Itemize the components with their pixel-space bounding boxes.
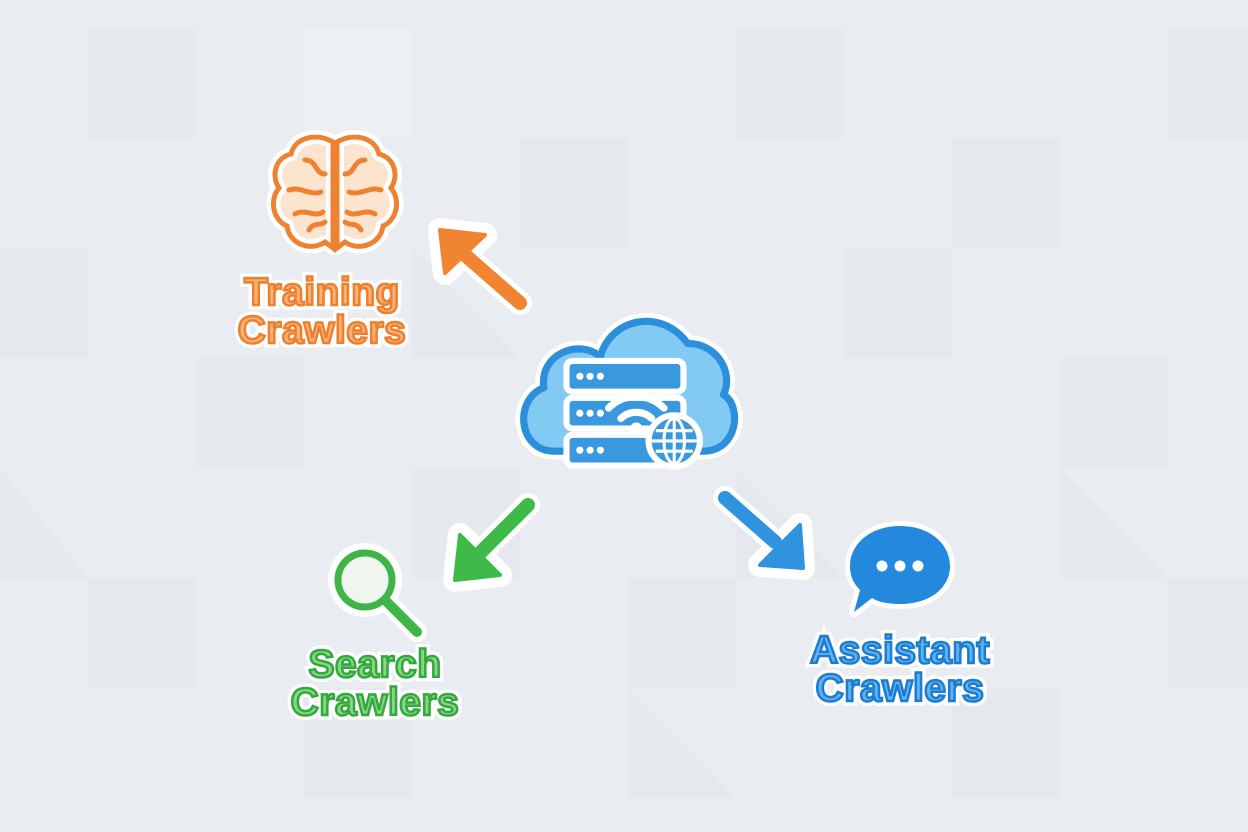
- icon: brain (training): [266, 130, 404, 255]
- label: Search Crawlers: Crawlers: [291, 681, 459, 724]
- arrow: green to search: [443, 493, 540, 592]
- label: Search Crawlers: [288, 643, 462, 724]
- label: Assistant Crawlers: Assistant: [810, 629, 990, 672]
- arrow: orange to training: [428, 218, 532, 315]
- icon: chat bubble (assistant): [845, 521, 955, 617]
- label: Assistant Crawlers: Crawlers: [816, 667, 984, 710]
- label: Training Crawlers: Crawlers: [238, 309, 406, 352]
- label: Assistant Crawlers: Crawlers: [816, 667, 984, 710]
- label: Training Crawlers: Training: [244, 271, 400, 314]
- label: Search Crawlers: Crawlers: [291, 681, 459, 724]
- label: Search Crawlers: Search: [308, 643, 442, 686]
- label: Training Crawlers: Training: [244, 271, 400, 314]
- arrow: blue to assistant: [713, 486, 815, 580]
- label: Training Crawlers: [234, 271, 409, 352]
- label: Search Crawlers: Search: [308, 643, 442, 686]
- label: Training Crawlers: Crawlers: [238, 309, 406, 352]
- icon: cloud server: [516, 313, 743, 470]
- icon: magnifier (search): [328, 543, 427, 642]
- label: Assistant Crawlers: [804, 624, 994, 710]
- label: Assistant Crawlers: Assistant: [810, 629, 990, 672]
